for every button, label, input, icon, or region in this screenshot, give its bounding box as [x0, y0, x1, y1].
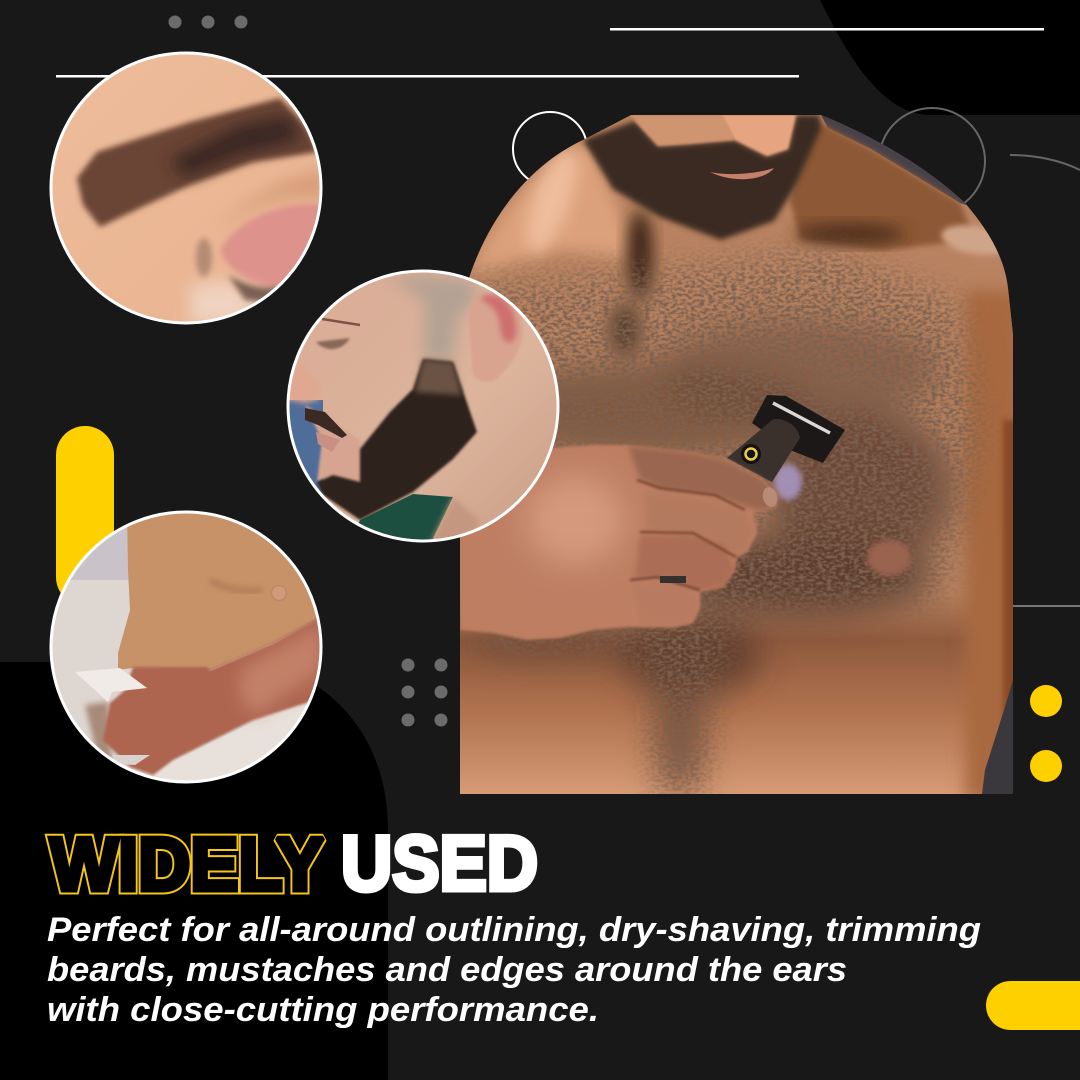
power symbol — [741, 444, 761, 464]
top dots — [168, 16, 248, 28]
lower torso skin — [460, 600, 976, 794]
arm highlight — [240, 625, 322, 715]
dark side background — [982, 680, 1013, 794]
top right line — [610, 28, 1044, 30]
neck shadow — [430, 497, 480, 545]
right torso skin — [965, 290, 1025, 800]
trimmer handle — [727, 419, 800, 482]
description text: with close-cutting performance. — [47, 991, 599, 1029]
hand — [460, 445, 779, 640]
nipple — [867, 540, 911, 576]
torso — [118, 512, 322, 670]
yellow dots right — [1030, 685, 1062, 782]
arm and hand — [103, 614, 325, 775]
heading word: USED: USED — [341, 819, 538, 907]
main photo: chest with trimmer — [460, 115, 1025, 800]
description text: beards, mustaches and edges around the ears — [47, 951, 847, 989]
breastbone shadow — [627, 210, 653, 300]
nipple — [272, 586, 286, 600]
description text — [47, 911, 981, 1029]
lips — [710, 168, 774, 179]
circle photo: eyebrow — [50, 52, 325, 325]
beard — [317, 359, 477, 520]
blue background — [290, 400, 323, 494]
lips — [316, 432, 340, 452]
back of hand highlight — [525, 475, 625, 565]
centre dots grid — [402, 658, 448, 726]
lower face — [305, 405, 362, 485]
dark chest shadows — [460, 320, 950, 795]
grey wall — [50, 512, 130, 580]
corner shape: top right — [820, 0, 1080, 115]
nose shadow — [196, 238, 212, 278]
heading word: WIDELY: WIDELY — [50, 822, 324, 906]
nose — [722, 115, 796, 156]
index finger — [628, 446, 777, 511]
eyebrow and eye — [322, 319, 360, 325]
finger nail — [762, 487, 778, 507]
right horizontal line — [1013, 605, 1080, 607]
hand towel — [75, 668, 147, 702]
eyelashes — [228, 275, 280, 302]
left shoulder highlight — [470, 140, 640, 275]
lower pale skin — [190, 280, 270, 325]
lower towel — [150, 697, 325, 790]
metal in grip — [660, 576, 686, 583]
right curve line — [1010, 155, 1080, 170]
nose — [290, 380, 322, 407]
trimmer light — [774, 464, 802, 500]
upper lid crease — [240, 170, 320, 214]
pink eyelid — [220, 204, 322, 290]
outline circle left — [513, 112, 587, 186]
circle photo: torso with towel — [50, 512, 325, 790]
trimmer head — [752, 395, 845, 463]
hair fade — [385, 275, 478, 362]
shirt — [350, 494, 453, 545]
face skin above beard — [631, 115, 735, 146]
yellow pill left — [56, 426, 114, 606]
finger gaps — [630, 480, 745, 590]
trimmer — [727, 395, 845, 482]
hair texture — [470, 238, 996, 794]
outline circle right — [879, 108, 985, 214]
grey background sliver — [821, 115, 966, 205]
ear — [469, 293, 523, 382]
moustache — [305, 408, 347, 438]
eyebrow — [77, 98, 318, 227]
under beard shadow — [795, 224, 905, 244]
yellow pill bottom right — [986, 981, 1080, 1030]
other fingers — [645, 492, 755, 556]
neck shadow right — [790, 120, 975, 250]
description text: Perfect for all-around outlining, dry-shaving, trimming — [47, 911, 981, 949]
heading word: WIDELY: WIDELY — [50, 822, 324, 906]
heading — [50, 819, 538, 907]
towel in grip — [112, 755, 150, 765]
top left line — [56, 75, 799, 78]
shoulder highlight right — [938, 222, 1000, 257]
circle photo: beard profile — [285, 271, 558, 545]
beard — [583, 115, 821, 240]
corner shape: bottom left — [0, 662, 388, 1080]
dark shadow under hand — [85, 702, 112, 765]
